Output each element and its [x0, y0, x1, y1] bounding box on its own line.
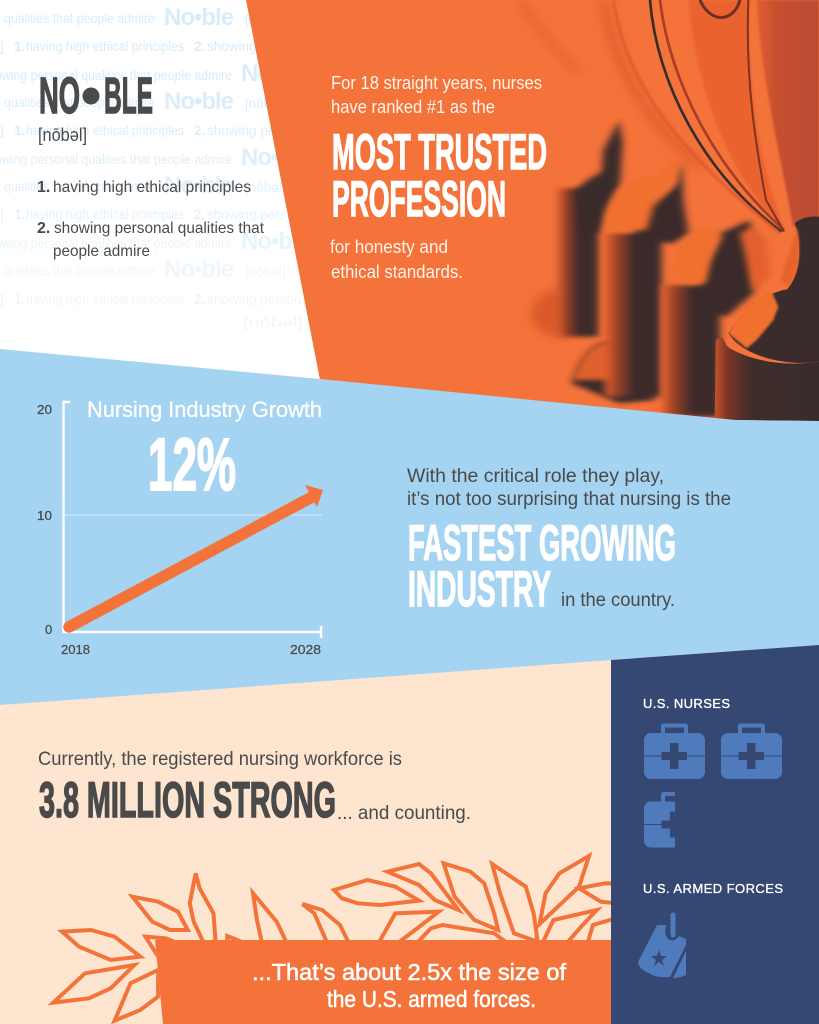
heading: most trusted profession	[332, 124, 547, 227]
background pattern of repeated definition text: qualities that people admire	[4, 11, 155, 26]
background pattern of repeated definition text: No•ble	[241, 144, 311, 171]
text: for 18 straight years: For 18 straight years, nurses	[331, 73, 542, 93]
chart title: Nursing Industry Growth	[87, 397, 322, 422]
definition 2: people admire	[53, 243, 150, 260]
text: workforce: Currently, the registered nursing workforce is	[38, 749, 402, 770]
definition 1: 1.	[37, 179, 50, 196]
axis labels: 10	[37, 508, 52, 523]
text: for 18 straight years: have ranked #1 as the	[331, 97, 495, 117]
image: blurred trophies	[520, 0, 819, 425]
piece 2	[572, 142, 688, 403]
icon: partial medical kit	[644, 792, 675, 848]
piece 1	[532, 120, 623, 337]
label: U.S. armed forces: U.S. ARMED FORCES	[643, 881, 783, 896]
text: for honesty	[330, 237, 463, 282]
text: fastest growing industry	[407, 466, 731, 617]
panel: noble definition	[37, 67, 265, 260]
heading: most trusted profession: PROFESSION	[332, 171, 506, 227]
chart axes	[64, 402, 321, 638]
background pattern of repeated definition text: having high ethical principles	[26, 123, 184, 138]
panel: blue growth section	[0, 349, 819, 705]
callout text: the U.S. armed forces.	[327, 986, 536, 1012]
trophy bowl and handle	[520, 0, 819, 233]
text: fastest growing industry: With the critical role they play,	[407, 466, 664, 487]
text: workforce: ... and counting.	[337, 803, 471, 824]
background pattern of repeated definition text: No•ble	[241, 60, 311, 87]
callout text	[252, 959, 567, 1012]
heading: No•ble: NO	[39, 67, 80, 124]
background pattern of repeated definition text: No•ble	[241, 228, 311, 255]
big number 12%: 12%	[148, 423, 236, 506]
piece 3	[662, 220, 770, 417]
heading: most trusted profession: MOST TRUSTED	[332, 124, 547, 180]
heading: fastest growing	[408, 515, 676, 617]
background pattern of repeated definition text: having high ethical principles	[26, 292, 184, 307]
axis labels: 20	[37, 402, 52, 417]
background pattern of repeated definition text: [nōbəl]	[243, 315, 303, 330]
axis labels: 2018	[61, 642, 90, 657]
background pattern of repeated definition text: [nōbəl]	[245, 12, 286, 27]
trophy pieces	[532, 120, 819, 425]
background pattern of repeated definition text: No•ble	[164, 256, 234, 283]
background pattern of repeated definition text	[0, 4, 312, 330]
panel: navy comparison	[611, 645, 819, 1024]
background pattern of repeated definition text: qualities that people admire	[4, 95, 155, 110]
background pattern of repeated definition text: 2.	[194, 123, 205, 138]
icon: partial dog tag	[638, 915, 686, 978]
background pattern of repeated definition text: qualities that people admire	[4, 179, 155, 194]
icon: medical kit 1	[644, 724, 705, 779]
background pattern of repeated definition text: 2.	[194, 292, 205, 307]
background pattern of repeated definition text: ]	[0, 39, 4, 54]
axis labels: 0	[45, 622, 52, 637]
panel: peach workforce background	[0, 640, 819, 1024]
text: workforce: 3.8 MILLION STRONG	[39, 772, 336, 828]
definition 2: showing personal qualities that	[54, 220, 265, 237]
background pattern of repeated definition text: showing personal	[207, 292, 312, 307]
background pattern of repeated definition text: qualities that people admire	[4, 263, 155, 278]
background pattern of repeated definition text: No•ble	[164, 88, 234, 115]
background pattern of repeated definition text: 1.	[14, 292, 25, 307]
text: workforce	[38, 749, 471, 828]
chart: nursing industry growth	[37, 397, 323, 657]
panel: orange trusted profession with trophy photo	[246, 0, 819, 425]
text: fastest growing industry: in the country.	[561, 590, 675, 611]
background pattern of repeated definition text: [nōbəl]	[245, 96, 286, 111]
background pattern of repeated definition text: No•ble	[164, 4, 234, 31]
background pattern of repeated definition text: 1.	[14, 207, 25, 222]
background pattern of repeated definition text: No•ble	[164, 172, 234, 199]
panel: noble definition: BLE	[104, 67, 153, 124]
pronunciation: [nōbəl]	[38, 125, 87, 145]
arrow: growth line	[69, 485, 323, 627]
background pattern of repeated definition text: ]	[0, 207, 4, 222]
background pattern of repeated definition text: 2.	[194, 39, 205, 54]
background pattern of repeated definition text: ]	[0, 292, 4, 307]
label: U.S. nurses: U.S. NURSES	[643, 696, 730, 711]
definition 1: having high ethical principles	[53, 179, 251, 196]
text: for honesty: for honesty and	[330, 237, 448, 257]
icon: medical kit 2	[721, 724, 782, 779]
text: for honesty: ethical standards.	[331, 262, 463, 282]
callout text: ...That’s about 2.5x the size of	[252, 959, 567, 985]
background pattern of repeated definition text: [nōbəl]	[245, 180, 286, 195]
background pattern of repeated definition text: having high ethical principles	[26, 207, 184, 222]
background pattern of repeated definition text: ]	[0, 123, 4, 138]
text: fastest growing industry: it’s not too surprising that nursing is the	[407, 489, 731, 510]
background pattern of repeated definition text: having high ethical principles	[26, 39, 184, 54]
axis labels: 2028	[290, 642, 321, 657]
heading: No•ble	[39, 67, 153, 124]
large cup	[715, 217, 819, 425]
callout: 2.5x banner	[155, 940, 611, 1024]
background pattern of repeated definition text: showing personal	[207, 39, 312, 54]
definition 2: 2.	[37, 220, 50, 237]
background pattern of repeated definition text: showing personal	[207, 207, 312, 222]
illustration: leaves	[53, 856, 632, 1021]
background pattern of repeated definition text: 2.	[194, 207, 205, 222]
background pattern of repeated definition text: 1.	[14, 123, 25, 138]
background pattern of repeated definition text: [nōbəl]	[245, 264, 286, 279]
background pattern of repeated definition text: showing personal	[207, 123, 312, 138]
background pattern of repeated definition text: 1.	[14, 39, 25, 54]
axis labels	[37, 402, 321, 657]
text: for 18 straight years	[331, 73, 542, 117]
heading: fastest growing: INDUSTRY	[408, 561, 551, 617]
